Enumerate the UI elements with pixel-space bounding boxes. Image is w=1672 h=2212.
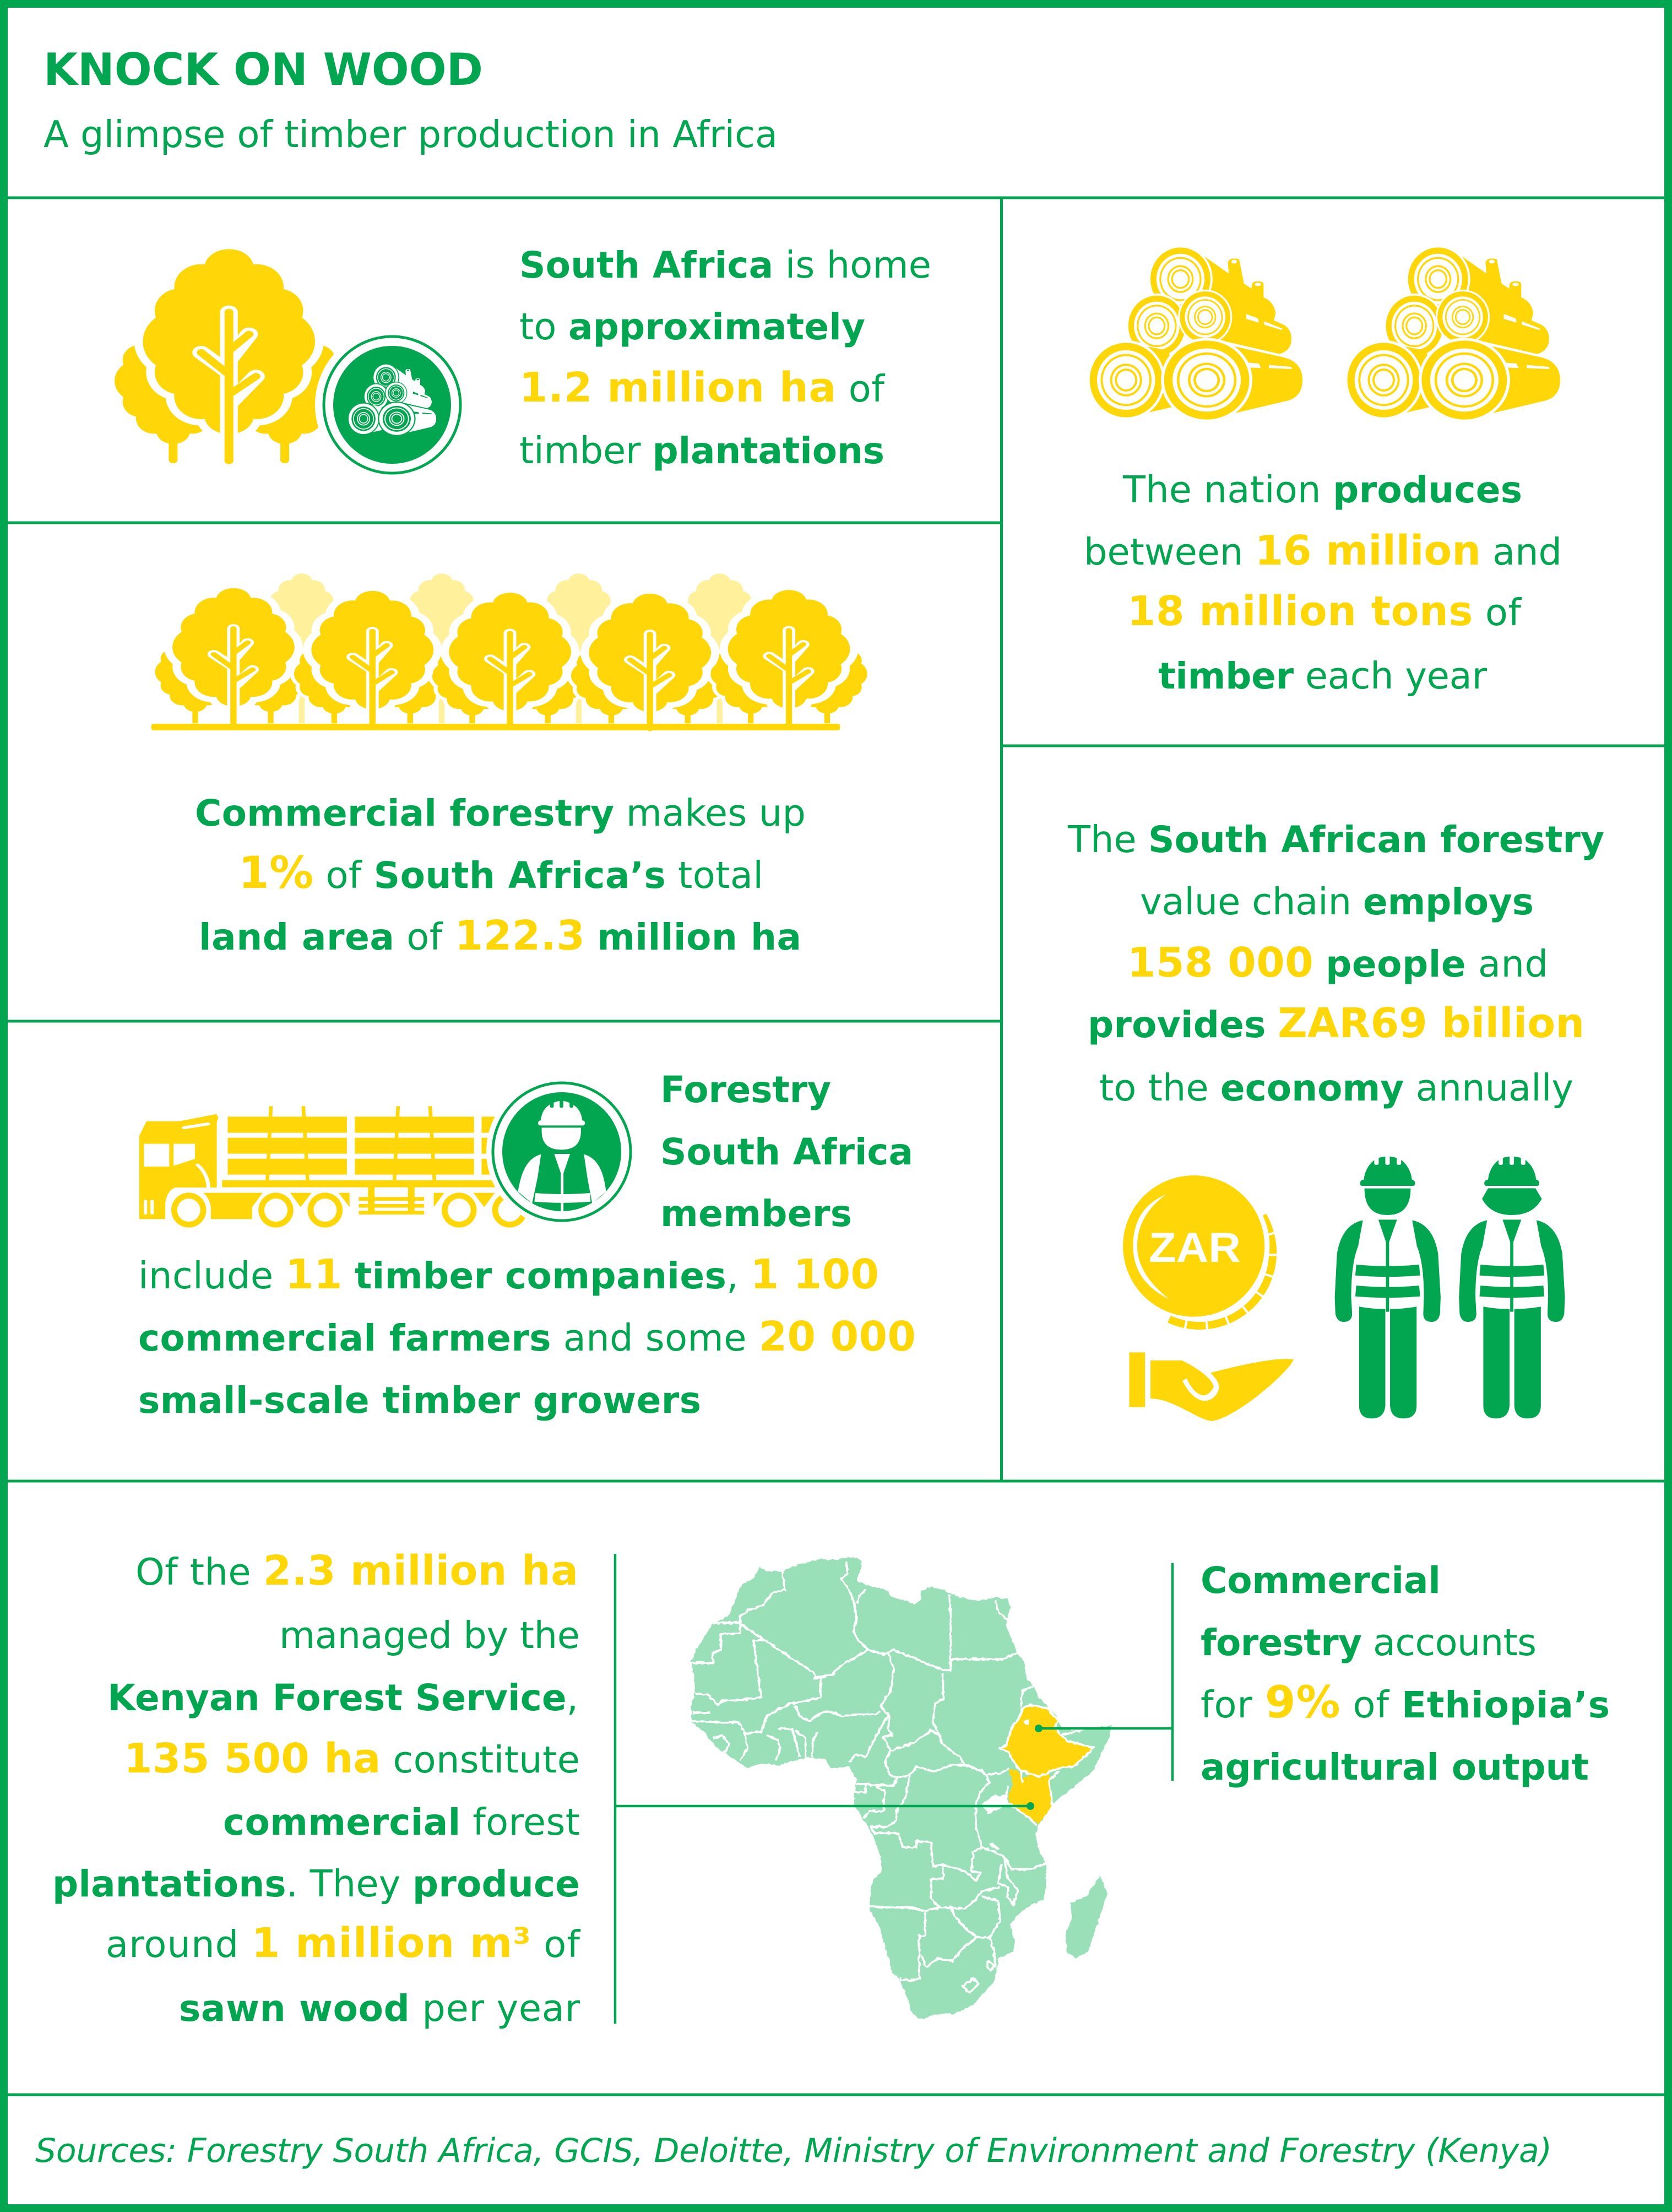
text: production: The nation produces [1122, 468, 1522, 511]
text: value chain: to the economy annually [1099, 1066, 1573, 1109]
text: members: South Africa [660, 1131, 913, 1173]
sources [8, 2094, 1664, 2204]
highlighted country: Kenya [1008, 1770, 1052, 1824]
text: production: timber each year [1158, 654, 1487, 697]
map: Africa [691, 1557, 1112, 2019]
panel: header [8, 8, 1664, 198]
text: land area: Commercial forestry makes up [195, 791, 806, 834]
text: members: Forestry [660, 1069, 831, 1111]
panel: Kenya and Ethiopia [8, 1481, 1664, 2094]
icon: row of trees [151, 573, 867, 730]
text: value chain: The South African forestry [1067, 818, 1604, 861]
text: Ethiopia: forestry accounts [1201, 1621, 1537, 1664]
text: members: include 11 timber companies, 1 100 [138, 1251, 879, 1298]
text: value chain: value chain employs [1140, 880, 1534, 923]
text: Ethiopia: for 9% of Ethiopia’s [1201, 1677, 1610, 1728]
icon: ZAR coin in hand: ZAR [1149, 1224, 1241, 1271]
text: land area: land area of 122.3 million ha [199, 912, 801, 959]
subtitle: A glimpse of timber production in Africa [44, 113, 778, 156]
text: Kenya: Kenyan Forest Service, [107, 1676, 578, 1719]
text: Kenya: plantations. They produce [52, 1862, 580, 1905]
panel: value chain [1001, 745, 1664, 1481]
panel: commercial forestry [8, 522, 1001, 1020]
text: plantations: to approximately [519, 305, 865, 348]
highlighted country: Ethiopia [1000, 1705, 1094, 1776]
text: Ethiopia: agricultural output [1201, 1746, 1589, 1788]
panel: production [1001, 198, 1664, 745]
leader line: Kenya [615, 1554, 1034, 2024]
text: value chain: 158 000 people and [1127, 939, 1548, 986]
text: plantations: 1.2 million ha of [519, 364, 885, 411]
text: land area [195, 791, 806, 959]
text: Kenya: managed by the [279, 1614, 580, 1657]
text: plantations [519, 243, 931, 472]
sources: Sources: Forestry South Africa, GCIS, Deloitte, Ministry of Environment and Forestry (Kenya) [35, 2132, 1552, 2170]
text: members: small-scale timber growers [138, 1379, 701, 1422]
text: Kenya [52, 1547, 580, 2030]
icon: worker badge [486, 1076, 637, 1227]
text: land area: 1% of South Africa’s total [238, 847, 763, 898]
text: members: commercial farmers and some 20 000 [138, 1313, 916, 1360]
text: Ethiopia [1201, 1559, 1610, 1788]
icon: trees with logs badge [115, 249, 343, 461]
text: members [138, 1069, 916, 1422]
text: members: members [660, 1192, 852, 1235]
text: value chain [1067, 818, 1604, 1109]
leader line: Ethiopia [1035, 1563, 1172, 1781]
text: Kenya: 135 500 ha constitute [124, 1735, 580, 1782]
text: production [1084, 468, 1562, 697]
icon: ZAR coin in hand [1118, 1173, 1294, 1421]
text: value chain: provides ZAR69 billion [1088, 1000, 1584, 1047]
country borders [691, 1561, 1094, 1993]
text: plantations: timber plantations [519, 429, 884, 472]
title: KNOCK ON WOOD [44, 44, 483, 95]
text: Kenya: sawn wood per year [179, 1987, 580, 2030]
text: production: 18 million tons of [1127, 588, 1522, 635]
text: Kenya: around 1 million m³ of [106, 1920, 580, 1967]
icon: logs badge [315, 328, 469, 482]
text: production: between 16 million and [1084, 527, 1562, 574]
text: plantations: South Africa is home [519, 243, 931, 286]
icon: two log piles [1087, 245, 1560, 422]
text: Kenya: commercial forest [223, 1801, 580, 1844]
icon: logging truck [139, 1106, 527, 1228]
icon: two workers [1335, 1156, 1565, 1418]
text: Kenya: Of the 2.3 million ha [135, 1547, 578, 1595]
panel: plantations [8, 198, 1001, 522]
text: Ethiopia: Commercial [1201, 1559, 1441, 1602]
panel: Forestry South Africa members [8, 1020, 1001, 1481]
